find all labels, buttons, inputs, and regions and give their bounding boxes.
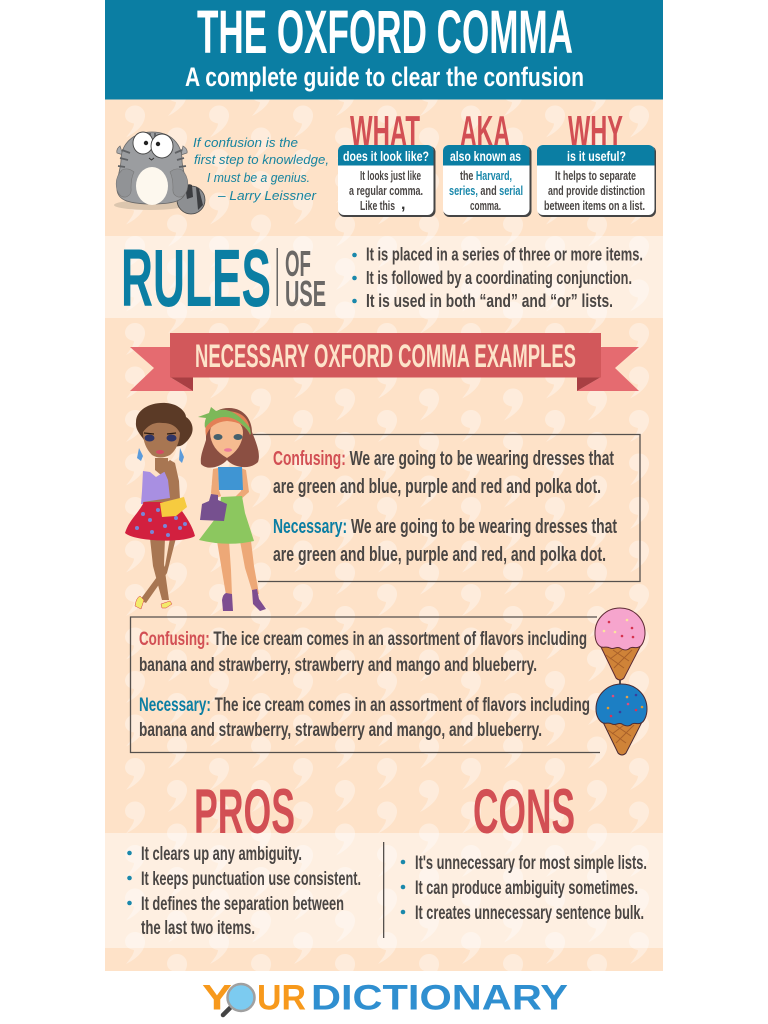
text: necessary dresses: Necessary: We are going to be wearing dresses that [273,516,617,538]
heading: of use: OF [285,243,311,284]
text: confusing dresses: Confusing: We are going to be wearing dresses that [273,448,614,470]
icon: confused cat mascot [114,132,205,214]
pros list: It defines the separation between [141,894,344,915]
footer logo: Y [202,978,232,1018]
quote by Larry Leissner: – Larry Leissner [217,188,317,203]
page background [105,0,663,971]
pros list [127,844,361,939]
pros list: the last two items. [141,918,255,939]
rules list: It is followed by a coordinating conjunction. [366,267,632,288]
cons list: It's unnecessary for most simple lists. [415,853,647,874]
heading: cons: CONS [473,777,575,847]
quote by Larry Leissner: first step to knowledge, [194,152,329,167]
panel: what: Like this [360,199,395,213]
heading: why: WHY [568,107,623,156]
rules list: It is placed in a series of three or more items. [366,244,643,264]
panel: what: a regular comma. [349,184,423,198]
rules list: It is used in both “and” and “or” lists. [366,290,613,311]
panel: why: between items on a list. [544,199,645,213]
heading: what: WHAT [350,107,420,156]
cons list: It creates unnecessary sentence bulk. [415,903,644,924]
ribbon heading [130,333,639,391]
icon: magnifying glass [223,984,254,1015]
footer logo: DICTIONARY [311,978,568,1018]
panel: ice cream example: banana and strawberry, strawberry and mango, and blueberry. [139,720,542,741]
panel: what: , [401,196,405,213]
text: confusing ice cream: Confusing: The ice cream comes in an assortment of flavors including [139,629,587,650]
heading: of use: USE [285,273,326,314]
cons list: It can produce ambiguity sometimes. [415,878,638,899]
rules of use band [105,233,663,324]
panel: ice cream example: banana and strawberry, strawberry and mango and blueberry. [139,655,537,676]
panel: why: It helps to separate [555,169,636,183]
panel: aka: also known as [450,148,521,164]
heading: aka: AKA [460,107,510,156]
panel: what [338,107,436,217]
panel: aka [443,107,532,217]
text: necessary ice cream: Necessary: The ice cream comes in an assortment of flavors including [139,695,590,716]
pros and cons band [105,833,663,948]
quote by Larry Leissner: I must be a genius. [207,170,310,185]
icon: girl in green skirt [198,407,266,611]
panel: aka: the Harvard, [460,169,512,183]
heading: of use [285,243,326,314]
pros list: It keeps punctuation use consistent. [141,869,361,890]
footer logo [202,978,568,1018]
heading: rules: RULES [121,233,271,324]
icon: girl in polka dot skirt [125,403,195,609]
subtitle: A complete guide to clear the confusion [185,62,584,92]
panel: ice cream example [130,617,600,752]
footer logo: UR [257,978,306,1018]
panel: dresses example: are green and blue, purple and red, and polka dot. [273,544,606,566]
quote by Larry Leissner [193,135,329,203]
panel: why: and provide distinction [548,184,645,198]
pros list: It clears up any ambiguity. [141,844,302,865]
panel: dresses example [253,434,640,582]
panel: why: is it useful? [567,148,626,164]
heading: pros: PROS [194,777,295,847]
panel: aka: series, and serial [449,184,523,198]
panel: what: It looks just like [360,169,421,183]
panel: aka: comma. [470,199,501,213]
panel: why [537,107,656,217]
panel: dresses example: are green and blue, purple and red and polka dot. [273,476,601,498]
header banner [105,0,663,100]
cons list [401,853,647,924]
rules list [352,244,643,311]
icon: blue ice cream cone [596,684,647,755]
icon: pink ice cream cone [595,608,645,680]
quote by Larry Leissner: If confusion is the [193,135,298,150]
panel: what: does it look like? [343,148,429,164]
